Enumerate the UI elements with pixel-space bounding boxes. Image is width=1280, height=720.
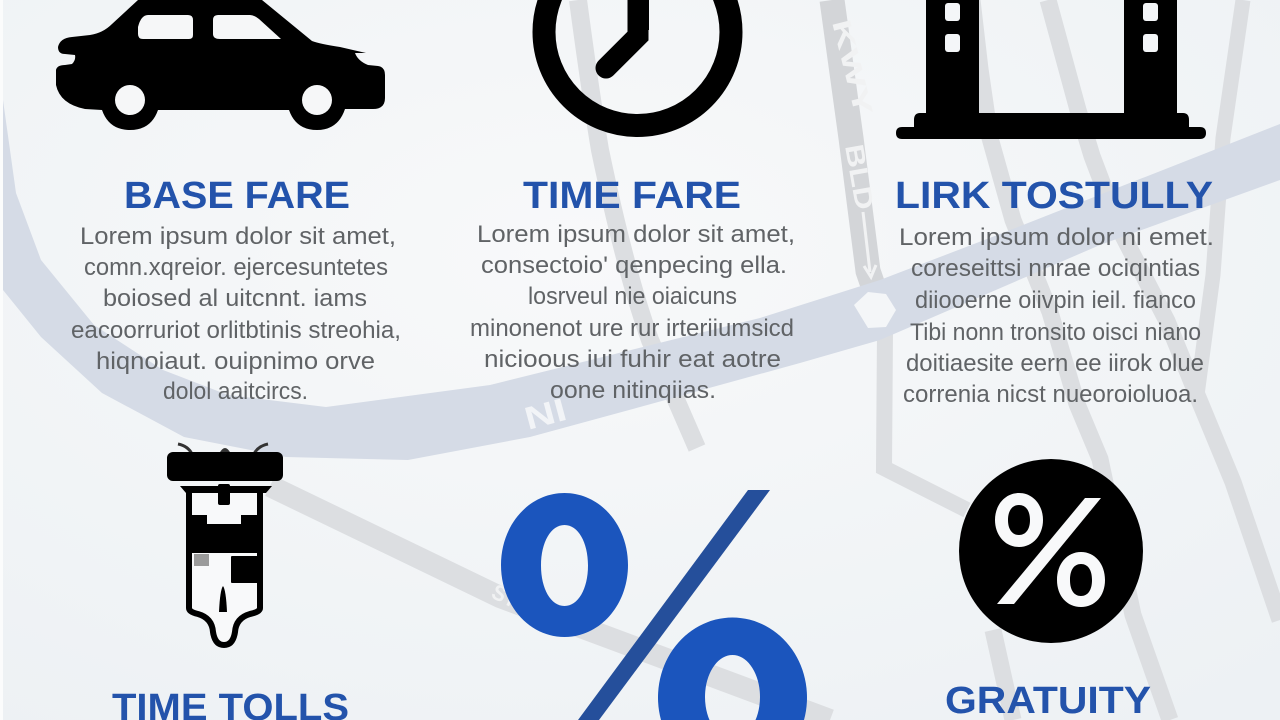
text block: time fare: losrveul nie oiaicuns bbox=[528, 283, 737, 310]
text block: base fare: comn.xqreior. ejercesuntetes bbox=[84, 254, 388, 281]
background street map: BLD bbox=[839, 142, 880, 212]
icon: bridge tower bbox=[896, 0, 1206, 139]
text block: base fare: dolol aaitcircs. bbox=[163, 378, 308, 405]
text block: time fare: minonenot ure rur irteriiumsicd bbox=[470, 315, 794, 342]
text block: time fare bbox=[470, 221, 795, 404]
icon: car bbox=[56, 0, 385, 130]
background street map: STREET bbox=[488, 579, 571, 637]
text block: link tostully: coreseittsi nnrae ociqintias bbox=[911, 255, 1200, 282]
text block: link tostully: doitiaesite eern ee iirok olue bbox=[906, 350, 1204, 377]
heading: time fare: TIME FARE bbox=[523, 175, 741, 217]
text block: base fare bbox=[71, 223, 401, 405]
text block: link tostully: Lorem ipsum dolor ni emet. bbox=[899, 224, 1214, 251]
icon: gratuity percent badge bbox=[959, 459, 1143, 643]
text block: base fare: boiosed al uitcnnt. iams bbox=[103, 285, 367, 312]
icon: toll tower bbox=[167, 444, 283, 645]
text block: base fare: eacoorruriot orlitbtinis streohia, bbox=[71, 317, 401, 344]
heading: base fare: BASE FARE bbox=[124, 175, 350, 217]
text block: time fare: Lorem ipsum dolor sit amet, bbox=[477, 221, 795, 248]
text block: link tostully: correnia nicst nueoroioluoa. bbox=[903, 381, 1198, 408]
background street map: KWY bbox=[826, 16, 879, 119]
text block: link tostully: diiooerne oiivpin ieil. fianco bbox=[915, 287, 1196, 314]
heading: link tostully: LIRK TOSTULLY bbox=[895, 175, 1213, 217]
icon: large percent sign bbox=[501, 490, 807, 720]
text block: link tostully: Tibi nonn tronsito oisci niano bbox=[910, 319, 1201, 346]
text block: time fare: consectoio' qenpecing ella. bbox=[481, 252, 787, 279]
text block: time fare: oone nitinqiias. bbox=[550, 377, 716, 404]
text block: link tostully bbox=[899, 224, 1214, 408]
background street map: NI bbox=[520, 391, 570, 437]
text block: time fare: nicioous iui fuhir eat aotre bbox=[484, 346, 781, 373]
icon: clock bbox=[544, 0, 731, 126]
text block: base fare: hiqnoiaut. ouipnimo orve bbox=[96, 348, 375, 375]
text block: base fare: Lorem ipsum dolor sit amet, bbox=[80, 223, 396, 250]
